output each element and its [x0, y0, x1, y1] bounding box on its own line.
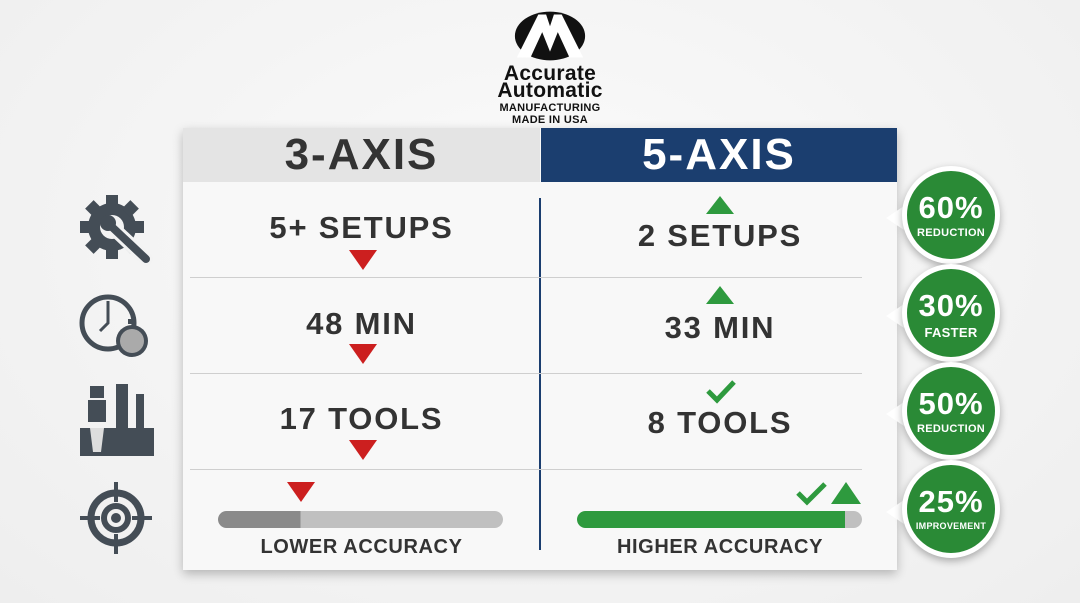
logo: Accurate	[504, 62, 596, 85]
heading: 5-axis	[541, 128, 897, 182]
bar: lower	[218, 511, 503, 528]
badge: 50%	[897, 360, 1004, 464]
bar: higher	[577, 511, 862, 528]
check	[706, 380, 736, 404]
badge: 30%	[897, 262, 1004, 366]
3-axis tools: 17 TOOLS	[280, 401, 443, 436]
icon: gear wrench	[80, 195, 150, 263]
badge: 25%: 25%	[918, 484, 984, 519]
icon: clock stopwatch	[80, 294, 148, 357]
heading: 3-axis	[183, 128, 540, 182]
label higher: HIGHER ACCURACY	[617, 536, 823, 558]
badge: 60%: REDUCTION	[917, 227, 985, 239]
green up arrow	[706, 196, 734, 214]
logo: MANUFACTURING	[499, 102, 601, 114]
logo: MADE IN USA	[512, 114, 588, 126]
3-axis min: 48 MIN	[306, 306, 417, 341]
logo: Automatic	[497, 79, 603, 102]
row: minutes	[306, 286, 775, 364]
icon: AM mark	[514, 12, 586, 60]
heading: 5-axis: 5-AXIS	[642, 130, 796, 179]
divider	[539, 198, 541, 550]
badge: 50%: 50%	[918, 386, 984, 421]
badge: 60%	[897, 164, 1004, 268]
badge: 30%: FASTER	[924, 325, 978, 340]
row: setups	[269, 196, 802, 270]
3-axis setups: 5+ SETUPS	[269, 210, 454, 245]
table panel	[183, 128, 897, 570]
badge: 25%: IMPROVEMENT	[916, 521, 986, 531]
icon: target	[80, 482, 152, 554]
badge: 50%: REDUCTION	[917, 423, 985, 435]
badge: 30%: 30%	[918, 288, 984, 323]
5-axis tools: 8 TOOLS	[648, 405, 792, 440]
5-axis setups: 2 SETUPS	[638, 218, 802, 253]
icon: tools	[80, 384, 154, 456]
label lower: LOWER ACCURACY	[260, 536, 463, 558]
badge: 60%: 60%	[918, 190, 984, 225]
red down arrow	[349, 250, 377, 270]
heading: 3-axis: 3-AXIS	[285, 130, 438, 179]
row: accuracy	[218, 482, 862, 558]
5-axis min: 33 MIN	[665, 310, 775, 345]
logo	[497, 12, 603, 126]
row: tools	[280, 380, 792, 460]
badge: 25%	[897, 458, 1004, 566]
